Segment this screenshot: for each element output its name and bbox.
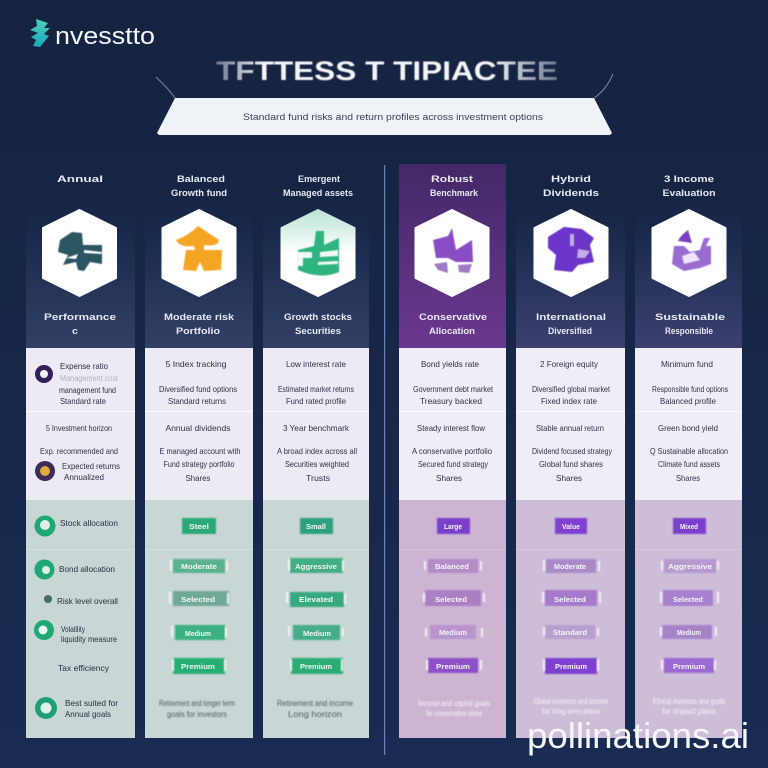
icon: small marker	[44, 595, 52, 603]
row label: volatility: Volatility	[61, 624, 86, 634]
row label: fees: Management cost	[60, 373, 119, 383]
row label: volatility	[61, 624, 117, 644]
column 3 label	[284, 312, 352, 336]
column 6 label: Sustainable	[655, 312, 725, 322]
column 3 tinted section	[263, 500, 369, 738]
suitability note	[653, 697, 725, 716]
column 3 white section: 3 Year benchmark	[283, 423, 350, 433]
pill: risk: Selected	[554, 595, 586, 604]
pill: stocks	[182, 518, 216, 534]
pill: stocks: Large	[444, 522, 462, 531]
row label: suitability: Annual goals	[65, 709, 111, 719]
column 3 heading: Managed assets	[283, 188, 353, 198]
column 4 white section: Steady interest flow	[417, 423, 486, 433]
icon: column 1 hexagon	[43, 210, 116, 296]
column 4 label	[419, 312, 487, 336]
column 4 heading: Robust	[431, 174, 473, 184]
suitability note	[534, 697, 608, 716]
icon: green badge 2	[34, 560, 54, 580]
icon: green hexagon	[282, 210, 354, 296]
column 2 heading	[171, 174, 227, 198]
pill: risk: Elevated	[299, 595, 333, 604]
pill: bonds: Aggressive	[295, 562, 337, 571]
pill: volatility: Medium	[439, 628, 467, 637]
column 1 header panel	[26, 205, 135, 348]
icon: orange hexagon	[162, 210, 236, 296]
pill: stocks: Small	[306, 522, 326, 531]
column 4 white section: A conservative portfolio	[412, 446, 492, 456]
column 4 white section: Shares	[436, 473, 462, 483]
pill: tax: Premium	[181, 662, 215, 671]
pill: tax: Premium	[555, 662, 587, 671]
column 3 white section: A broad index across all	[277, 446, 357, 456]
column 2 white section: Shares	[186, 473, 210, 483]
suitability note: Global investors and income	[534, 697, 608, 706]
column 4 tinted section	[399, 500, 506, 738]
column 2 header panel	[145, 205, 253, 348]
icon: purple hexagon 2	[534, 210, 608, 296]
suitability note: Retirement and longer term	[159, 699, 235, 708]
column 2	[145, 174, 253, 738]
pill: tax	[290, 658, 343, 674]
column 5	[516, 174, 625, 738]
logo	[30, 19, 155, 50]
column 6 heading: Evaluation	[662, 188, 716, 198]
suitability note: for long term plans	[542, 707, 600, 716]
column 3 white section: Estimated market returns	[278, 384, 354, 394]
column 2 white section	[145, 348, 253, 500]
column 3 white section: Trusts	[306, 473, 330, 483]
column 2 white section: E managed account with	[160, 446, 241, 456]
row label: suitability	[65, 698, 118, 719]
column 6 tinted section	[635, 500, 742, 738]
pill: volatility	[543, 625, 599, 639]
column 3	[263, 174, 369, 738]
pill: risk	[169, 591, 229, 606]
column 6 white section: Shares	[676, 473, 700, 483]
row label: volatility: liquidity measure	[61, 634, 117, 644]
column 6	[635, 174, 742, 738]
column 1 tinted section	[26, 500, 135, 738]
column 2 tinted section	[145, 500, 253, 738]
column 1 white section: Exp. recommended and	[40, 446, 118, 456]
column 6 label	[655, 312, 725, 336]
row label: horizon	[62, 461, 120, 482]
column 4 label: Allocation	[429, 326, 475, 336]
column 2 label: Moderate risk	[164, 312, 235, 322]
column 5 white section: 2 Foreign equity	[540, 359, 599, 369]
pill: risk	[423, 590, 485, 606]
column 4 heading	[430, 174, 479, 198]
pill: bonds	[424, 559, 482, 573]
suitability note: Ethical investors and goals	[653, 697, 725, 706]
column 5 heading	[543, 174, 599, 198]
pill: bonds: Moderate	[554, 562, 586, 571]
icon: purple hexagon 1	[416, 210, 488, 296]
pill: tax: Premium	[673, 662, 705, 671]
pill: stocks: Value	[562, 522, 580, 531]
pill: volatility: Medium	[303, 629, 331, 638]
row label: bonds: Bond allocation	[59, 564, 115, 574]
column 5 heading: Hybrid	[551, 174, 591, 184]
suitability note: for conservative plans	[426, 709, 482, 718]
column 5 white section: Global fund shares	[539, 459, 603, 469]
pill: stocks	[673, 518, 706, 534]
column 6 white section	[635, 348, 742, 500]
column 1 white section: 5 Investment horizon	[46, 423, 112, 433]
suitability note: Long horizon	[288, 710, 342, 719]
column 2 white section: Diversified fund options	[159, 384, 237, 394]
pill: risk	[660, 590, 719, 606]
pill: tax: Premium	[300, 662, 332, 671]
pill: volatility: Standard	[553, 628, 587, 637]
column 5 label: Diversified	[548, 326, 592, 336]
column 5 white section: Stable annual return	[536, 423, 604, 433]
row label: cash: Risk level overall	[57, 596, 118, 606]
column 6 white section: Minimum fund	[661, 359, 713, 369]
icon: green badge 3	[34, 620, 54, 640]
pill: volatility: Medium	[677, 628, 701, 637]
row label: horizon: Expected returns	[62, 461, 120, 471]
column 5 label: International	[536, 312, 606, 322]
column 2 white section: 5 Index tracking	[166, 359, 227, 369]
pill: tax	[543, 658, 599, 674]
pill: bonds	[543, 559, 600, 573]
column 1 heading: Annual	[57, 174, 103, 184]
pill: stocks	[437, 518, 470, 534]
column 4 white section: Government debt market	[413, 384, 494, 394]
column 2 heading: Balanced	[177, 174, 225, 184]
row label: fees	[59, 361, 119, 406]
column 5 heading: Dividends	[543, 188, 599, 198]
pill: risk	[286, 592, 346, 607]
column 2 heading: Growth fund	[171, 188, 227, 198]
column 5 label	[536, 312, 606, 336]
pill: risk: Selected	[673, 595, 703, 604]
column 4: highlighted	[399, 164, 506, 738]
icon: gold badge	[35, 461, 55, 481]
subtitle banner	[156, 74, 613, 135]
pill: stocks: Steel	[189, 522, 209, 531]
column 3 white section: Low interest rate	[286, 359, 346, 369]
column 5 white section: Shares	[556, 473, 582, 483]
column 5 white section: Diversified global market	[532, 384, 611, 394]
column 1: row labels	[26, 174, 135, 738]
column 6 white section: Green bond yield	[658, 423, 718, 433]
column 4 label: Conservative	[419, 312, 487, 322]
icon: purple hexagon 3	[652, 210, 726, 296]
vertical divider	[384, 165, 385, 755]
column 4 white section: Secured fund strategy	[418, 459, 489, 469]
column 5 white section: Dividend focused strategy	[532, 446, 613, 456]
row label: fees: Expense ratio	[60, 361, 108, 371]
pill: risk: Selected	[181, 595, 215, 604]
column 2 label	[164, 312, 235, 336]
column 3 label: Growth stocks	[284, 312, 352, 322]
pill: volatility	[425, 625, 483, 639]
pill: risk	[542, 590, 601, 606]
title: TFTTESS T TIPIACTEE	[216, 56, 558, 86]
row label: suitability: Best suited for	[65, 698, 118, 708]
column 5 white section	[516, 348, 625, 500]
row label: fees: Standard rate	[60, 396, 106, 406]
column 6 heading: 3 Income	[664, 174, 714, 184]
column 3 white section: Securities weighted	[285, 459, 349, 469]
suitability note: Income and capital goals	[418, 699, 490, 708]
column 6 heading	[662, 174, 716, 198]
pill: risk: Selected	[435, 595, 467, 604]
column 1 label: Performance	[44, 312, 116, 322]
logo wordmark: nvesstto	[55, 23, 155, 50]
column 6 white section: Q Sustainable allocation	[650, 446, 728, 456]
icon: green badge 4	[35, 697, 57, 719]
column 2 label: Portfolio	[176, 326, 221, 336]
column 6 white section: Climate fund assets	[658, 459, 720, 469]
column 4 white section: Treasury backed	[420, 396, 482, 406]
suitability note	[277, 699, 353, 719]
pill: tax	[426, 658, 482, 673]
pill: stocks	[300, 518, 333, 534]
column 2 white section: Fund strategy portfolio	[164, 459, 235, 469]
pill: bonds	[170, 559, 228, 573]
column 6 white section: Responsible fund options	[652, 384, 728, 394]
pill: volatility	[660, 625, 717, 639]
pill: bonds: Moderate	[181, 562, 217, 571]
column 2 white section: Standard returns	[168, 396, 226, 406]
pill: volatility	[288, 625, 344, 640]
column 5 tinted section	[516, 500, 625, 738]
pill: volatility	[171, 625, 227, 640]
pill: tax	[661, 658, 716, 673]
icon: logo mark	[30, 19, 50, 47]
column 3 header panel	[263, 205, 369, 348]
column 4 white section	[399, 348, 506, 500]
column 1 white section	[26, 348, 135, 500]
column 4 header panel	[399, 164, 506, 348]
column 3 heading: Emergent	[298, 174, 340, 184]
row label: fees: management fund	[59, 385, 116, 395]
column 4 white section: Bond yields rate	[421, 359, 479, 369]
row label: horizon: Annualized	[64, 472, 104, 482]
pill: tax: Premium	[436, 662, 470, 671]
column 3 white section	[263, 348, 369, 500]
suitability note: goals for investors	[167, 710, 227, 719]
row label: tax: Tax efficiency	[58, 663, 110, 673]
pill: volatility: Medium	[185, 629, 211, 638]
column 6 header panel	[635, 205, 742, 348]
column 6 label: Responsible	[665, 326, 713, 336]
pill: bonds: Balanced	[435, 562, 469, 571]
column 3 white section: Fund rated profile	[286, 396, 346, 406]
column 1 label	[44, 312, 116, 336]
pill: bonds	[661, 559, 719, 573]
icon: green badge 1	[34, 516, 56, 536]
suitability note: for impact plans	[662, 707, 716, 716]
column 3 heading	[283, 174, 353, 198]
column 4 heading: Benchmark	[430, 188, 479, 198]
pill: tax	[172, 658, 226, 674]
banner text: Standard fund risks and return profiles across investment options	[243, 112, 544, 122]
row label: minimum: Stock allocation	[60, 518, 118, 528]
column 5 white section: Fixed index rate	[541, 396, 597, 406]
column 2 white section: Annual dividends	[166, 423, 230, 433]
column 5 header panel	[516, 205, 625, 348]
pill: stocks: Mixed	[680, 522, 698, 531]
suitability note	[159, 699, 235, 719]
watermark: pollinations.ai	[527, 715, 749, 756]
pill: bonds	[288, 558, 344, 573]
icon: purple ring	[35, 365, 53, 383]
pill: stocks	[555, 518, 587, 534]
column 1 label: c	[72, 326, 78, 336]
suitability note	[418, 699, 490, 718]
column 6 white section: Balanced profile	[660, 396, 716, 406]
column 3 label: Securities	[295, 326, 341, 336]
pill: bonds: Aggressive	[668, 562, 712, 571]
suitability note: Retirement and income	[277, 699, 353, 708]
